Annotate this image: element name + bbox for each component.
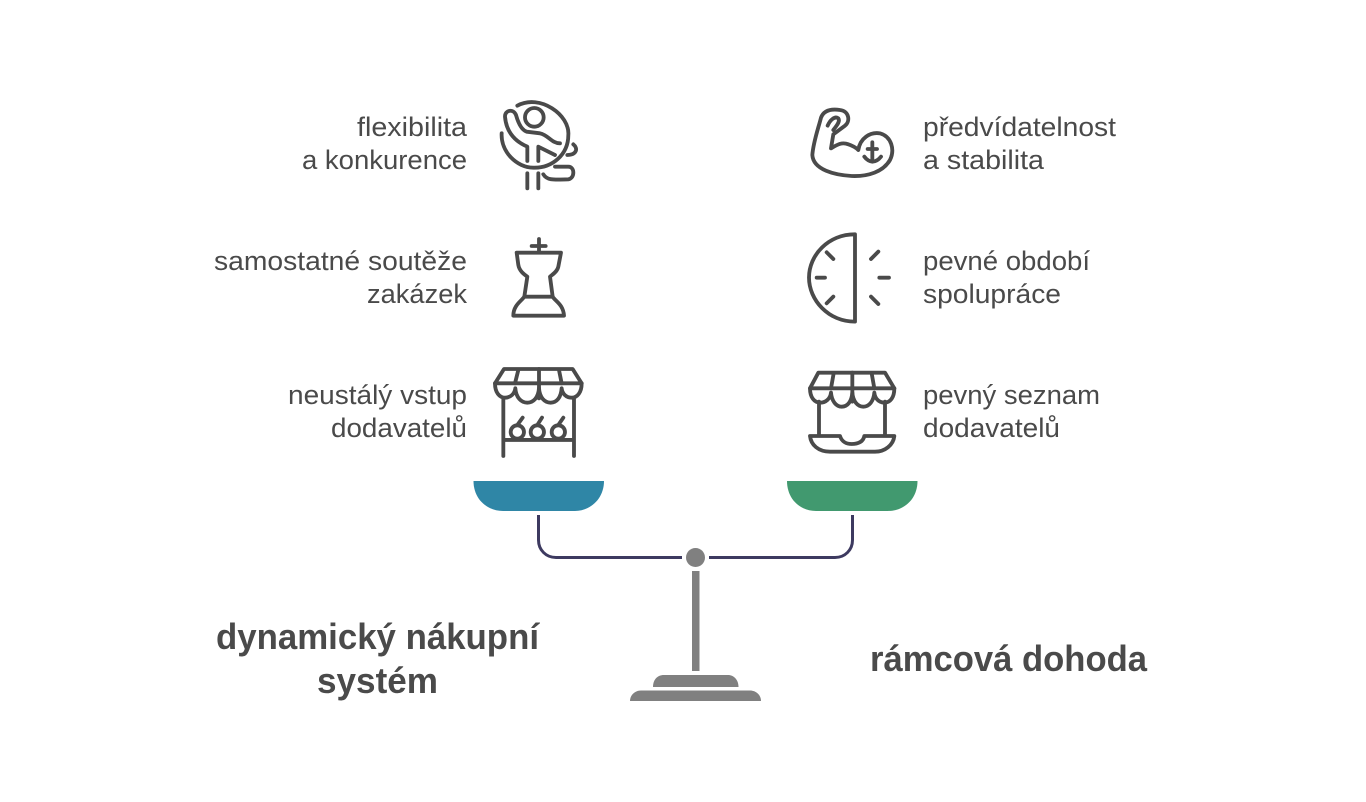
text: pevný seznam dodavatelů: pevný seznam — [923, 380, 1100, 410]
scale: left pan — [474, 481, 604, 511]
heading: dynamický nákupní systém: dynamický nákupní — [216, 616, 540, 657]
text: pevný seznam dodavatelů — [923, 380, 1100, 443]
icon: half clock — [809, 234, 889, 322]
text: samostatné soutěže zakázek: samostatné soutěže — [214, 246, 467, 276]
text: pevné období spolupráce — [923, 246, 1091, 309]
heading: dynamický nákupní systém — [216, 616, 540, 701]
text: pevné období spolupráce: spolupráce — [923, 279, 1061, 309]
heading: rámcová dohoda: rámcová dohoda — [870, 638, 1148, 679]
scale: pivot — [686, 548, 705, 567]
scale: beam — [538, 515, 852, 558]
icon: gymnast in ring — [502, 102, 576, 188]
text: předvídatelnost a stabilita: a stabilita — [923, 145, 1045, 175]
icon: chess king — [513, 239, 564, 316]
scale: base — [630, 675, 761, 701]
text: pevný seznam dodavatelů: dodavatelů — [923, 413, 1060, 443]
text: flexibilita a konkurence: a konkurence — [302, 145, 467, 175]
scale: right pan — [787, 481, 918, 511]
text: samostatné soutěže zakázek — [214, 246, 467, 309]
text: samostatné soutěže zakázek: zakázek — [367, 279, 467, 309]
text: neustálý vstup dodavatelů — [288, 380, 467, 443]
text: předvídatelnost a stabilita — [923, 112, 1117, 175]
text: neustálý vstup dodavatelů: dodavatelů — [331, 413, 467, 443]
text: flexibilita a konkurence: flexibilita — [357, 112, 468, 142]
text: pevné období spolupráce: pevné období — [923, 246, 1091, 276]
scale: post — [692, 571, 700, 671]
icon: shop storefront — [810, 373, 894, 452]
text: neustálý vstup dodavatelů: neustálý vstup — [288, 380, 467, 410]
icon: flexed arm with anchor — [812, 110, 892, 176]
text: flexibilita a konkurence — [302, 112, 468, 175]
icon: market stall with fruit — [495, 369, 582, 456]
text: předvídatelnost a stabilita: předvídatelnost — [923, 112, 1117, 142]
heading: dynamický nákupní systém: systém — [317, 660, 438, 701]
